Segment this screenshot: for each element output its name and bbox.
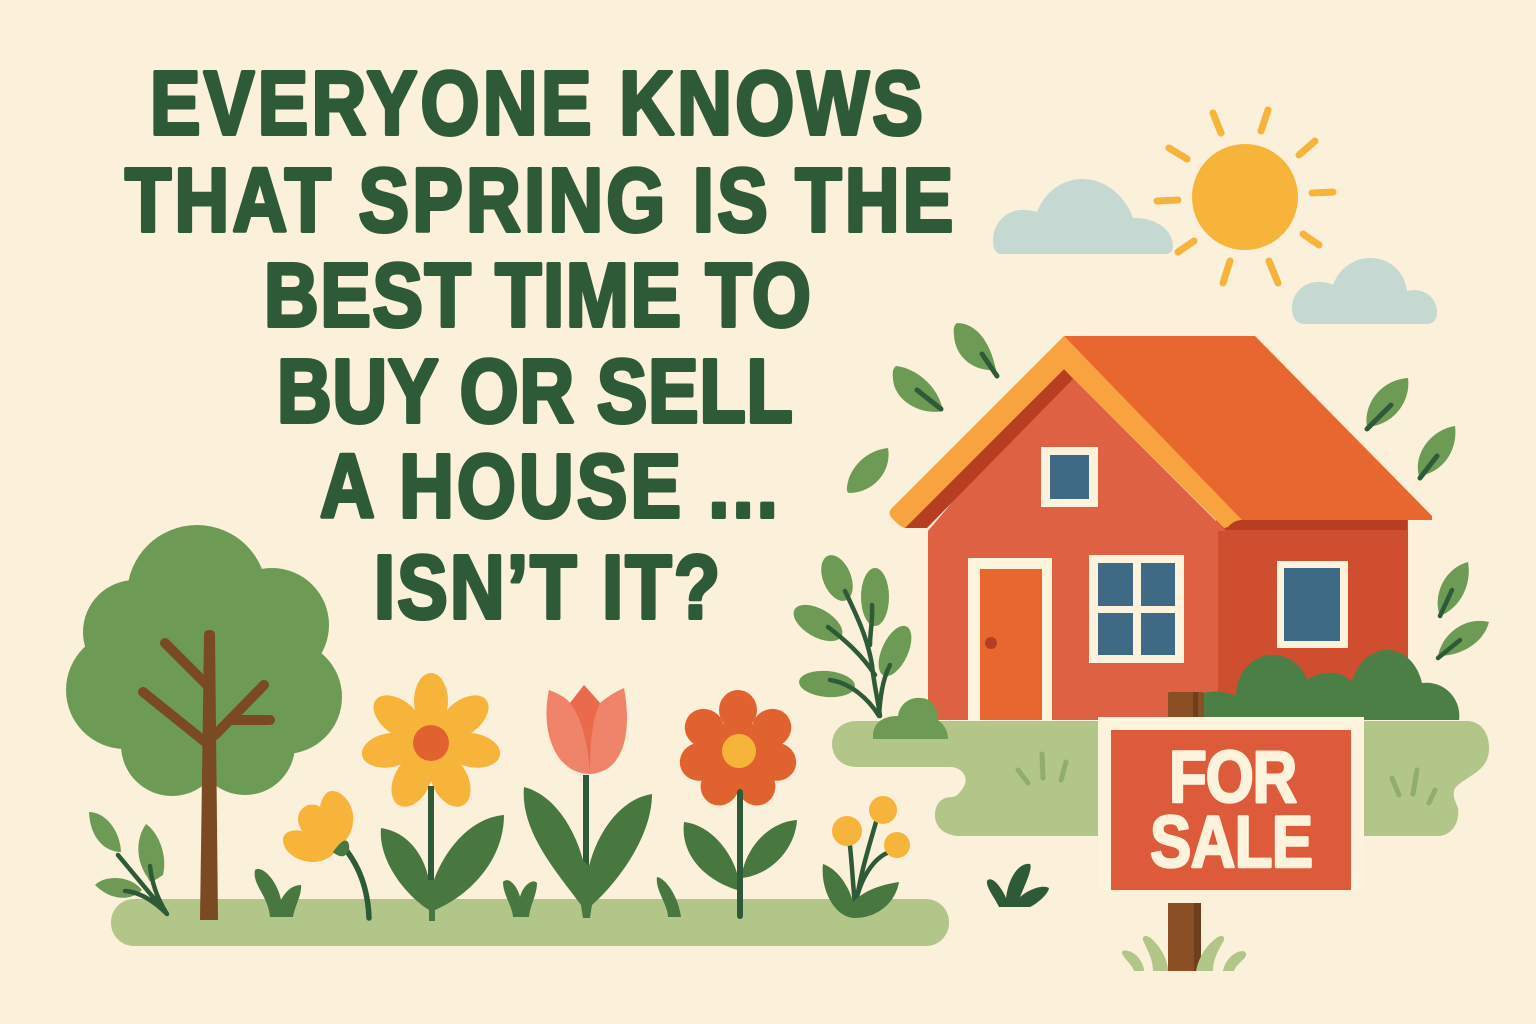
main window bbox=[1089, 555, 1184, 663]
flower: yellow daisy bbox=[359, 673, 504, 921]
title: THAT SPRING IS THE bbox=[125, 150, 953, 250]
grass tufts bbox=[255, 869, 681, 917]
ground: house lawn bbox=[832, 721, 1489, 836]
upper window bbox=[1041, 447, 1098, 507]
title: BUY OR SELL bbox=[277, 341, 793, 441]
small grass tuft bbox=[987, 864, 1049, 907]
flower: small yellow bbox=[283, 791, 369, 918]
house bbox=[890, 336, 1432, 720]
door bbox=[968, 558, 1052, 720]
roof eave bbox=[890, 336, 1242, 528]
wall band below roof bbox=[1226, 520, 1407, 530]
title: ISN’T IT? bbox=[374, 537, 720, 637]
title: A HOUSE ... bbox=[320, 436, 778, 536]
sign text: SALE bbox=[1150, 802, 1313, 883]
plant far left bbox=[89, 812, 167, 914]
icon: sun bbox=[1157, 110, 1333, 283]
sign post upper bbox=[1168, 692, 1204, 722]
icon: cloud left bbox=[993, 179, 1173, 254]
house leaves bbox=[847, 323, 1489, 658]
grass at post bbox=[1122, 936, 1246, 971]
sign board bbox=[1098, 717, 1364, 890]
title bbox=[125, 53, 953, 637]
roof main bbox=[1064, 336, 1432, 520]
ground: garden strip bbox=[111, 899, 949, 946]
side window bbox=[1277, 561, 1348, 648]
small bush bbox=[873, 698, 948, 739]
sign post lower bbox=[1168, 903, 1201, 971]
right wall bbox=[1216, 520, 1408, 720]
for sale sign bbox=[1098, 692, 1364, 971]
sign text: FOR bbox=[1169, 737, 1297, 818]
plant beside house bbox=[788, 551, 918, 716]
icon: cloud right bbox=[1292, 258, 1437, 324]
title: EVERYONE KNOWS bbox=[150, 53, 923, 153]
flower: yellow buds bbox=[823, 796, 910, 918]
left wall bbox=[928, 369, 1226, 720]
sign text bbox=[1150, 737, 1313, 883]
bushes bbox=[1204, 650, 1459, 720]
roof shadow bbox=[904, 369, 1073, 528]
title: BEST TIME TO bbox=[264, 245, 811, 345]
flower: tulip bbox=[524, 685, 652, 918]
tree bbox=[66, 525, 342, 920]
lawn grass marks bbox=[1018, 754, 1435, 803]
flower: orange daisy bbox=[675, 690, 801, 916]
